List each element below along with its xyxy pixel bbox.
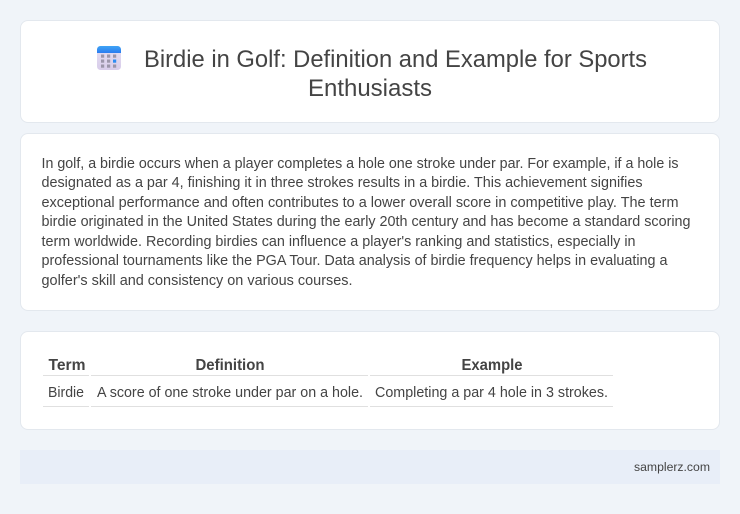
- footer: [20, 450, 720, 484]
- table row: Birdie: [48, 385, 84, 401]
- table header: Definition: [196, 357, 264, 374]
- table header: Term: [48, 357, 86, 374]
- footer text: samplerz.com: [634, 460, 710, 474]
- description text: golfer's skill and consistency on various courses.: [42, 273, 352, 289]
- panel: table: [20, 331, 720, 430]
- description text: professional tournaments like the PGA Tour. Data analysis of birdie frequency helps in evaluating a: [42, 253, 668, 269]
- title text: Enthusiasts: [308, 75, 432, 102]
- panel: description: [20, 133, 720, 311]
- description text: [42, 156, 690, 289]
- description text: term worldwide. Recording birdies can influence a player's ranking and statistics, especially in: [42, 234, 636, 250]
- title text: Birdie in Golf: Definition and Example for Sports: [144, 46, 647, 73]
- description text: designated as a par 4, finishing it in three strokes results in a birdie. This achievement signifies: [42, 175, 642, 191]
- table header: [48, 357, 523, 374]
- icon: calendar: [97, 46, 121, 70]
- panel: title: [20, 20, 720, 123]
- table row: A score of one stroke under par on a hole.: [97, 385, 363, 401]
- table header: Example: [462, 357, 523, 374]
- table row: Completing a par 4 hole in 3 strokes.: [375, 385, 608, 401]
- table: [43, 357, 613, 407]
- table row: [48, 385, 608, 401]
- description text: exceptional performance and often contributes to a lower overall score in competitive play. The term: [42, 195, 678, 211]
- description text: birdie originated in the United States during the early 20th century and has become a standard scoring: [42, 214, 690, 230]
- title text: [144, 46, 647, 102]
- description text: In golf, a birdie occurs when a player completes a hole one stroke under par. For example, if a hole is: [42, 156, 678, 172]
